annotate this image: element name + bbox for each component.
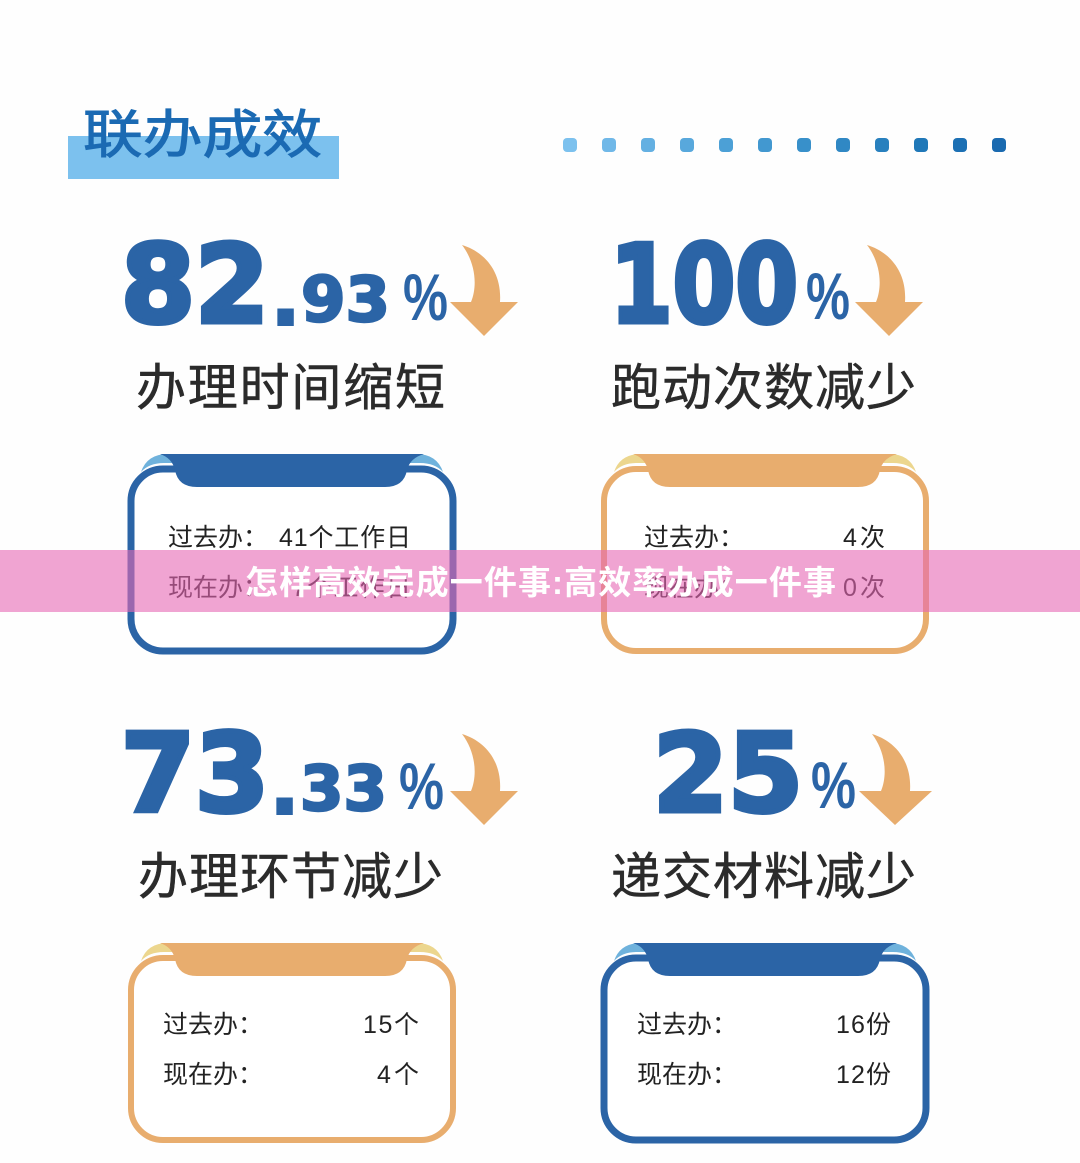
card: before and after: 过去办： (163, 1011, 263, 1039)
percent sign: % (399, 749, 444, 823)
card: before and after: 7个工作日 (292, 574, 411, 602)
percent sign: % (403, 260, 448, 334)
card: before and after: 过去办： (168, 524, 268, 552)
decorative dot row (563, 138, 1006, 152)
stat: 82.93%: . (270, 250, 301, 345)
label: 跑动次数减少: 跑动次数减少 (611, 360, 916, 416)
panel: trips (604, 223, 926, 651)
label: 办理环节减少: 办理环节减少 (138, 849, 443, 905)
stat: 82.93%: 93 (301, 263, 390, 336)
card: before and after: 过去办： (637, 1011, 737, 1039)
card: before and after: 15个 (363, 1011, 419, 1039)
banner: page title overlay (0, 550, 1080, 612)
icon: down arrow (859, 734, 932, 825)
heading: 联办成效: 联办成效 (83, 107, 322, 165)
card: before and after: 过去办： (644, 524, 744, 552)
card: before and after: 现在办： (637, 1061, 737, 1089)
percent sign: % (806, 259, 850, 333)
panel: processing time (121, 223, 518, 651)
card: before and after (604, 454, 926, 651)
card: before and after (131, 454, 453, 651)
card: before and after: 4个 (377, 1061, 419, 1089)
stat: 25%: 25 (653, 712, 803, 837)
stat: 73.33%: 73 (121, 712, 269, 837)
card: before and after: 现在办： (168, 574, 268, 602)
label: 递交材料减少: 递交材料减少 (611, 849, 916, 905)
card: before and after (131, 943, 453, 1140)
card: before and after (604, 943, 926, 1140)
panel: steps (121, 712, 518, 1140)
card: before and after: 0次 (843, 574, 885, 602)
stat: 82.93%: 82 (121, 223, 269, 348)
icon: down arrow (450, 734, 518, 825)
card: before and after: 现在办： (163, 1061, 263, 1089)
card: before and after: 16份 (836, 1011, 891, 1039)
heading: 联办成效 (68, 107, 339, 179)
card: before and after: 4次 (843, 524, 885, 552)
icon: down arrow (450, 245, 518, 336)
stat: 82.93% (121, 223, 390, 348)
icon: down arrow (855, 245, 923, 336)
stat: 73.33%: 33 (300, 752, 387, 825)
stat: 100%: 100 (610, 223, 798, 348)
banner: page title overlay: 怎样高效完成一件事:高效率办成一件事 (245, 564, 836, 601)
card: before and after: 41个工作日 (279, 524, 411, 552)
card: before and after: 现在办： (644, 574, 744, 602)
stat: 73.33% (121, 712, 387, 837)
stat: 73.33%: . (269, 739, 300, 834)
panel: documents (604, 712, 932, 1140)
label: 办理时间缩短: 办理时间缩短 (136, 360, 445, 416)
percent sign: % (811, 748, 856, 822)
card: before and after: 12份 (836, 1061, 891, 1089)
